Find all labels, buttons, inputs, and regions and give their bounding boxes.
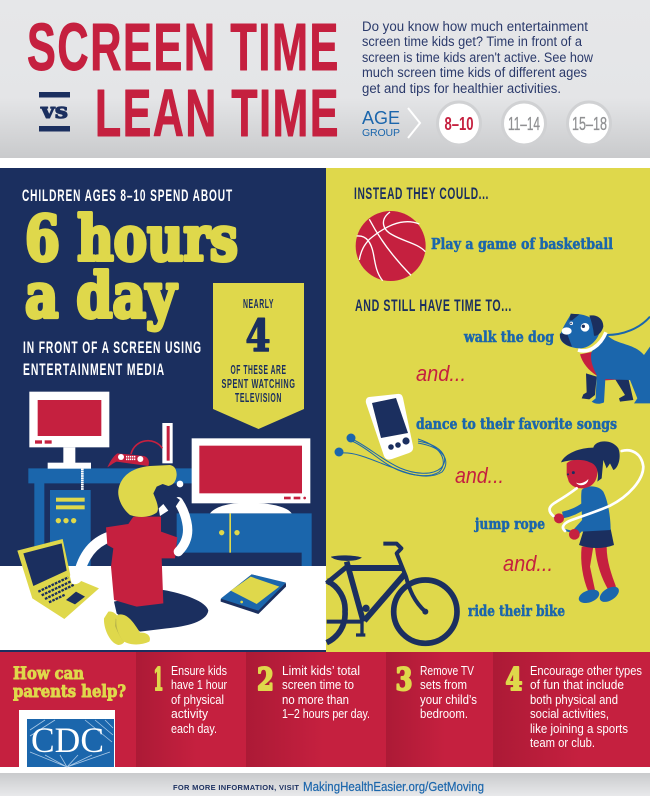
tip 4: 4 (506, 662, 522, 698)
footer label: FOR MORE INFORMATION, VISIT (173, 783, 299, 792)
tip 1: of physical (171, 693, 224, 707)
chevron arrow (408, 108, 420, 138)
icon: bicycle (327, 544, 457, 643)
lead-in text: CHILDREN AGES 8–10 SPEND ABOUT (22, 186, 233, 205)
age group label (362, 108, 400, 139)
callout banner: nearly 4: OF THESE ARE (230, 363, 286, 377)
tablet (221, 574, 286, 614)
feet (104, 611, 126, 645)
age group label: AGE (362, 108, 400, 128)
callout banner: nearly 4: SPENT WATCHING (222, 377, 296, 391)
footer (0, 773, 650, 796)
intro text: get and tips for healthier activities. (362, 81, 561, 96)
game controller (107, 441, 162, 467)
heading: instead they could: INSTEAD THEY COULD... (354, 184, 489, 203)
tip 3: Remove TV (420, 664, 475, 678)
activity: ride bike: ride their bike (468, 603, 565, 620)
tip 1: have 1 hour (171, 678, 227, 692)
tip 1: Ensure kids (171, 664, 227, 678)
child (78, 465, 208, 645)
callout banner: nearly 4: TELEVISION (235, 391, 282, 405)
and: and... (503, 551, 553, 576)
tip 4: team or club. (530, 736, 595, 750)
tip 1: 1 (154, 662, 164, 698)
activity: walk the dog: walk the dog (463, 329, 554, 346)
phone (155, 487, 180, 510)
tip 3 (396, 662, 477, 721)
desk (28, 468, 200, 566)
desktop monitor (29, 392, 109, 469)
left arm (78, 537, 110, 577)
callout banner: nearly 4 (213, 283, 304, 429)
intro text: screen is time kids aren't active. See how (362, 50, 593, 65)
tip 2: no more than (282, 693, 349, 707)
big stat: 6 hours: 6 hours (25, 202, 238, 275)
tip 3: 3 (396, 662, 412, 698)
tip 3: bedroom. (420, 707, 468, 721)
tip 4 (506, 662, 642, 750)
follow-on text: IN FRONT OF A SCREEN USING (23, 338, 202, 357)
shirt (106, 517, 177, 607)
tip 4: social activities, (530, 707, 609, 721)
follow-on text: ENTERTAINMENT MEDIA (23, 360, 165, 379)
intro text: much screen time kids of different ages (362, 65, 587, 80)
right arm (178, 502, 188, 552)
legs (114, 590, 208, 632)
vs badge: vs (40, 98, 68, 123)
heading: how can parents help: parents help? (13, 682, 126, 702)
illustration: child with screens (0, 392, 326, 650)
footer link: MakingHealthEasier.org/GetMoving (303, 779, 484, 794)
age group label: GROUP (362, 127, 400, 139)
tip 2: Limit kids’ total (282, 664, 360, 678)
intro text (362, 19, 593, 96)
tv cabinet (177, 513, 312, 566)
intro text: Do you know how much entertainment (362, 19, 588, 34)
title: screen time: SCREEN TIME (27, 10, 340, 85)
tip 3: sets from (420, 678, 467, 692)
heading: how can parents help (13, 664, 126, 702)
and: and... (455, 463, 504, 488)
big stat: a day: a day (25, 259, 178, 332)
header band (0, 0, 650, 158)
heading: how can parents help: How can (13, 664, 84, 684)
icon: music player with earbuds (334, 394, 446, 476)
age button 15-18 (568, 102, 610, 145)
age button 11-14 (502, 102, 546, 145)
age button 11-14: 11–14 (508, 114, 540, 134)
floor (0, 566, 326, 650)
activity: basketball: Play a game of basketball (431, 235, 613, 253)
callout banner: nearly 4: 4 (246, 311, 270, 362)
panel: how can parents help (0, 652, 650, 767)
tip 4: like joining a sports (530, 722, 628, 736)
logo: CDC: CDC (31, 720, 104, 760)
tip 4: both physical and (530, 693, 618, 707)
panel: lean time (yellow) (326, 168, 650, 652)
tip 3: your child’s (420, 693, 477, 707)
icon: dog (560, 314, 650, 404)
callout banner: nearly 4: NEARLY (243, 297, 274, 311)
neck (159, 504, 168, 516)
column shading (136, 652, 650, 767)
icon: girl jumping rope (550, 441, 643, 606)
game console (162, 423, 173, 463)
and: and... (416, 361, 466, 386)
tip 2 (257, 662, 370, 721)
activity: dance: dance to their favorite songs (416, 416, 617, 433)
tip 2: 2 (257, 662, 274, 698)
hair (118, 465, 177, 517)
tip 1: activity (171, 707, 209, 721)
activity: jump rope: jump rope (473, 516, 545, 533)
intro text: screen time kids get? Time in front of a (362, 34, 582, 49)
laptop (17, 539, 99, 619)
tip 4: of fun that include (530, 678, 624, 692)
age button 8-10: 8–10 (444, 114, 474, 134)
icon: basketball (356, 211, 426, 281)
heading: and still have time: AND STILL HAVE TIME TO... (355, 296, 512, 315)
computer tower (50, 490, 91, 566)
follow-on text (23, 338, 202, 379)
vs badge (39, 92, 70, 132)
title: lean time: LEAN TIME (95, 76, 340, 151)
tip 1 (154, 662, 227, 736)
logo: CDC (19, 710, 115, 767)
age button 15-18: 15–18 (572, 114, 607, 134)
tip 2: screen time to (282, 678, 354, 692)
tip 1: each day. (171, 722, 217, 736)
panel: screen time (navy) (0, 168, 326, 652)
television (192, 438, 310, 513)
age button 8-10 (438, 102, 480, 145)
tip 2: 1–2 hours per day. (282, 707, 370, 721)
